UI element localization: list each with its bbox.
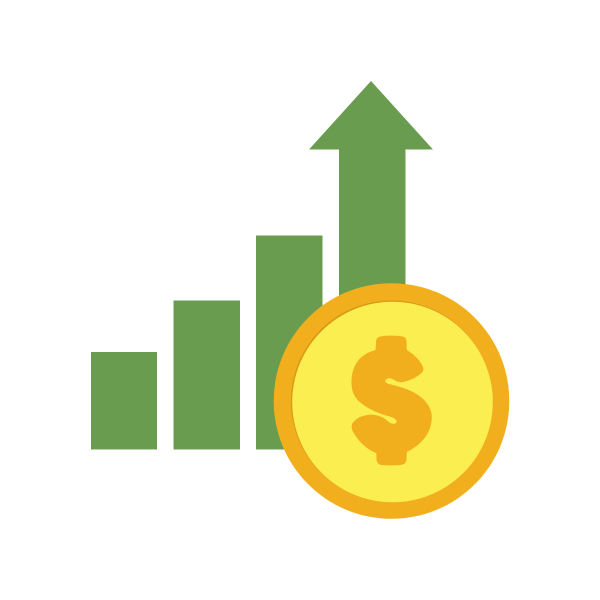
coin <box>274 283 509 519</box>
bar 1 <box>91 352 157 450</box>
coin rim <box>274 283 509 519</box>
coin face <box>292 302 493 502</box>
bar 3 <box>256 236 322 450</box>
bar 2 <box>174 300 240 450</box>
dollar sign <box>351 336 432 465</box>
coin inner shadow <box>291 300 492 502</box>
arrow pointing up <box>309 81 433 320</box>
